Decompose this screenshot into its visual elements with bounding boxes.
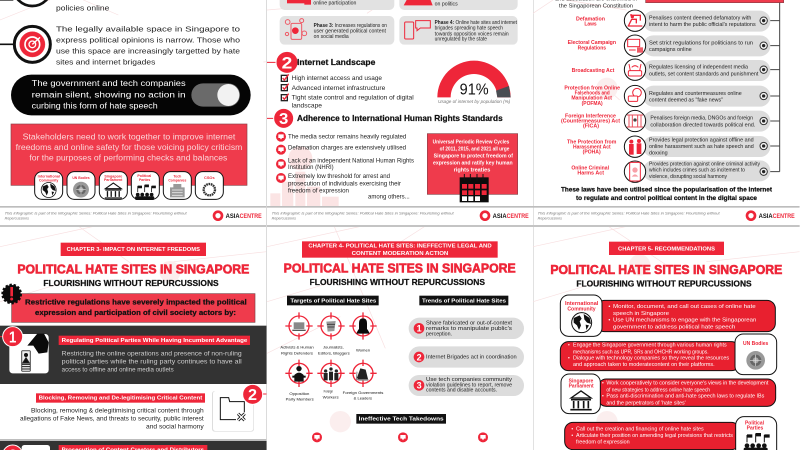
block: Political Parties: Call out the creation and financing of online hate sites bbox=[576, 426, 704, 432]
card: Political Parties: Political bbox=[137, 174, 151, 178]
row: Online Criminal Harms Act: Online Criminal bbox=[571, 166, 610, 172]
chapter label: CHAPTER 5- RECOMMENDATIONS bbox=[618, 246, 715, 252]
row: Defamation Laws: Defamation bbox=[576, 17, 605, 23]
target: Opposition: Party Members bbox=[286, 396, 314, 401]
bullet list: human rights: Defamation charges are extensively utilised bbox=[288, 145, 406, 152]
card: phase 2 bbox=[399, 0, 518, 10]
card: Political Parties: Parties bbox=[139, 178, 150, 182]
block: Singapore Parliament: and the perpetrators of 'hate sites' bbox=[606, 400, 686, 406]
row: Broadcasting Act: Broadcasting Act bbox=[572, 68, 615, 74]
row: POFMA: (POFMA) bbox=[582, 101, 603, 107]
target: Opposition: Opposition bbox=[289, 391, 309, 396]
callout: stakeholders box: for the purposes of performing checks and balances bbox=[29, 153, 227, 162]
block: UN Bodies: • bbox=[568, 355, 570, 361]
row: POFMA: Protection from Online bbox=[564, 85, 620, 91]
label: targets bbox=[287, 296, 379, 305]
block: Singapore Parliament: Pass anti-discrimination and anti-hate speech laws to regulate IBs bbox=[606, 394, 765, 400]
trend 3: violation guidelines to report, remove bbox=[426, 382, 512, 388]
row: Online Criminal Harms Act bbox=[571, 160, 770, 182]
bullet list: human rights: among others... bbox=[368, 194, 410, 201]
block: Singapore Parliament: • bbox=[602, 394, 604, 400]
row: POFMA: content deemed as "fake news" bbox=[649, 97, 723, 103]
target: Foreign Workers: Foreign bbox=[324, 388, 333, 393]
trend 2: 2 bbox=[417, 352, 422, 362]
trend 1 bbox=[409, 318, 524, 339]
card: Singapore Parliament bbox=[99, 172, 127, 199]
target: Opposition bbox=[285, 360, 314, 401]
trend 3: 3 bbox=[417, 381, 422, 391]
panel: chapter 1 history and landscape bbox=[267, 0, 534, 225]
label: ineffective takedowns: Ineffective Tech Takedowns bbox=[359, 417, 444, 423]
target: Foreign Governments: Foreign Governments bbox=[343, 390, 383, 395]
callout: restrictive regulations: Restrictive regulations have severely impacted the political bbox=[25, 298, 247, 307]
card: Tech Companies bbox=[163, 172, 191, 199]
block: International Community: International bbox=[565, 301, 599, 307]
block: International Community: • bbox=[608, 304, 610, 310]
footer bbox=[0, 206, 267, 221]
block: International Community: government to address political hate speech bbox=[613, 325, 735, 331]
section 3: prosecution bbox=[0, 441, 267, 450]
row: POHA: Provides legal protection against offline and bbox=[649, 137, 754, 143]
row: Defamation Laws: intent to harm the public official's reputations bbox=[649, 22, 756, 28]
callout: UPR cycles bbox=[427, 134, 518, 202]
callout: UPR cycles: expression and ratify key human bbox=[433, 161, 513, 167]
trend 3: Use tech companies community bbox=[426, 377, 512, 383]
row: Electoral Campaign Regulations: Electoral Campaign bbox=[568, 40, 616, 46]
gauge chart: 91% internet usage: Usage of internet by population (%) bbox=[438, 99, 511, 104]
callout: UPR cycles: Universal Periodic Review Cycles bbox=[433, 139, 510, 145]
callout: government silent toggle: remain silent, showing no action in bbox=[32, 90, 186, 99]
row: POHA: online harassment such as hate speech and bbox=[649, 144, 754, 150]
row: Defamation Laws: Laws bbox=[584, 22, 597, 28]
text: laws conclusion: to regulate and control political content in the digital space bbox=[576, 195, 757, 202]
chapter label bbox=[61, 243, 206, 256]
icon: cropped top circle bbox=[0, 0, 52, 6]
section 1: regulating political parties: access to offline and online media outlets bbox=[62, 366, 174, 373]
callout: stakeholders box: Stakeholders need to work together to improve internet bbox=[23, 133, 236, 142]
title bbox=[17, 263, 249, 288]
section 1: regulating political parties: 1 bbox=[9, 329, 17, 346]
section 2: blocking: Blocking, Removing and De-legitimising Critical Content bbox=[39, 396, 202, 402]
label: trends bbox=[419, 296, 508, 305]
text: legally available space: use this space are increasingly targetted by hate bbox=[56, 46, 240, 55]
block: International Community: Community bbox=[567, 306, 596, 312]
red box bottom edge bbox=[646, 0, 784, 3]
heading: 2 Internet Landscape: Internet Landscape bbox=[297, 57, 376, 67]
gauge chart: 91% internet usage bbox=[437, 61, 511, 104]
callout: UPR cycles: of 2011, 2015, and 2021 all urge bbox=[440, 147, 510, 153]
text: top paragraph end: policies online bbox=[56, 3, 109, 12]
text: constitution intro bbox=[555, 0, 637, 9]
card: phase 3: on social media bbox=[314, 34, 349, 40]
card: phase 4: unregulated by the state bbox=[435, 37, 487, 43]
block: UN Bodies: Engage the Singapore government through various human rights bbox=[573, 343, 727, 349]
block: UN Bodies: • bbox=[568, 343, 570, 349]
target: Journalists: Editors, Bloggers bbox=[318, 350, 350, 355]
card: phase 1 bbox=[280, 0, 394, 10]
block: International Community: Use UN mechanisms to engage with the Singaporean bbox=[613, 318, 756, 324]
section 1: regulating political parties: Restricting the online operations and presence of non-ruling bbox=[62, 351, 242, 358]
trend 2 bbox=[409, 346, 524, 368]
chapter label: CONTENT MODERATION ACTION bbox=[352, 251, 449, 257]
card: UN Bodies bbox=[67, 172, 95, 199]
callout: stakeholders box: freedoms and online safety for those voicing policy criticism bbox=[16, 143, 243, 152]
card: International Community: International bbox=[38, 174, 60, 178]
row: POHA bbox=[567, 136, 770, 157]
trend 3: contents and disable accounts. bbox=[426, 388, 497, 394]
text: laws conclusion: These laws have been utilised since the popularisation of the internet bbox=[561, 186, 773, 193]
row: POHA: doxxing bbox=[649, 150, 668, 156]
block: International Community: Monitor, document, and call out cases of online hate bbox=[613, 304, 756, 310]
icon: calendar bbox=[460, 174, 489, 202]
title bbox=[550, 263, 782, 288]
trend 1: remarks to manipulate public's bbox=[426, 326, 512, 332]
icon: alert badge bbox=[3, 285, 21, 303]
callout: UPR cycles: rights treaties bbox=[454, 167, 491, 173]
checklist: internet landscape: High internet access and usage bbox=[292, 75, 382, 82]
row: Online Criminal Harms Act: which includes crimes such as incitement to bbox=[649, 168, 745, 174]
trend 2: Internet Brigades act in coordination bbox=[426, 354, 517, 360]
section 2: blocking: allegations of Fake News, and threats to security, public interest bbox=[20, 416, 204, 423]
section 1: regulating political parties bbox=[0, 326, 267, 384]
row: POHA: Harassment Act bbox=[573, 144, 611, 150]
chapter label: CHAPTER 3- IMPACT ON INTERNET FREEDOMS bbox=[67, 247, 200, 253]
row: POFMA: Regulates and countermeasures online bbox=[649, 91, 742, 97]
connector tree bbox=[768, 3, 780, 172]
row: Online Criminal Harms Act: Harms Act bbox=[577, 171, 604, 177]
callout: restrictive regulations: expression and participation of civil society actors by: bbox=[35, 308, 236, 317]
row: Defamation Laws bbox=[576, 10, 770, 32]
row: POHA: The Protection from bbox=[567, 139, 617, 145]
block: Political Parties: Parties bbox=[747, 426, 764, 432]
stakeholder icons row bbox=[35, 172, 223, 200]
block: Singapore Parliament bbox=[561, 374, 776, 414]
row: Broadcasting Act bbox=[572, 59, 770, 81]
card: Singapore Parliament: Singapore bbox=[104, 174, 122, 178]
block: Singapore Parliament: Singapore bbox=[569, 378, 594, 384]
card: Singapore Parliament: Parliament bbox=[104, 178, 123, 182]
row: Electoral Campaign Regulations: Set strict regulations for politicians to run bbox=[649, 40, 753, 46]
target: Activists: Rights Defenders bbox=[281, 350, 313, 355]
footer bbox=[533, 206, 800, 221]
block: Political Parties bbox=[565, 417, 777, 450]
bullet list: human rights: Lack of an independent National Human Rights bbox=[288, 157, 414, 164]
card: phase 3: Phase 3: Increases regulations on bbox=[314, 23, 387, 29]
heading: 3 Adherence bbox=[267, 108, 503, 128]
icons: takedown bullets bbox=[312, 432, 488, 442]
card: UN Bodies: UN Bodies bbox=[72, 176, 90, 180]
block: UN Bodies: UN Bodies bbox=[743, 341, 769, 347]
text: laws conclusion bbox=[561, 186, 773, 202]
target: Activists: Activists & Human bbox=[280, 345, 314, 350]
block: Singapore Parliament: • bbox=[602, 381, 604, 387]
block: Political Parties: freedom of expression bbox=[576, 440, 630, 446]
row: POHA: (POHA) bbox=[583, 149, 601, 155]
block: UN Bodies bbox=[560, 334, 777, 375]
heading: 2 Internet Landscape bbox=[267, 51, 376, 73]
block: UN Bodies: and approach taken to moderatecontent on their platforms. bbox=[573, 362, 715, 368]
row: FICA: (FICA) bbox=[583, 124, 599, 130]
footer bbox=[267, 206, 534, 221]
target: Foreign Governments bbox=[343, 360, 383, 400]
row: Broadcasting Act: outlets, set content standards and punishment bbox=[649, 71, 759, 77]
bullet list: human rights: Extremely low threshold for arrest and bbox=[288, 173, 390, 180]
chapter label bbox=[609, 242, 724, 255]
chapter label bbox=[302, 241, 498, 258]
block: Political Parties: • bbox=[571, 433, 573, 439]
row: FICA: collaboration directed towards political end. bbox=[650, 122, 755, 128]
section 2: blocking: 2 bbox=[248, 387, 257, 404]
card: phase 4: brigades spreading hate speech bbox=[435, 26, 503, 32]
trend 1: Share fabricated or out-of-context bbox=[426, 320, 513, 326]
section 1: regulating political parties: political parties while the ruling party continues to have all bbox=[62, 359, 242, 366]
card: phase 4: towards opposition voices remain bbox=[435, 31, 509, 37]
row: FICA: Foreign Interference bbox=[565, 113, 616, 119]
row: Online Criminal Harms Act: violence, disrupting social harmony bbox=[649, 174, 727, 180]
panel: chapter 3 impact on internet freedoms bbox=[0, 225, 267, 450]
target: Foreign Workers: Workers bbox=[323, 394, 339, 399]
callout: stakeholders box bbox=[11, 124, 247, 185]
target: Activists bbox=[280, 312, 314, 355]
row: Broadcasting Act: Regulates licensing of independent media bbox=[649, 65, 748, 71]
skyline decoration bbox=[270, 146, 339, 206]
text: legally available space: The legally available space in Singapore to bbox=[56, 25, 240, 34]
card: International Community bbox=[35, 172, 63, 199]
target: Foreign Workers bbox=[317, 360, 345, 399]
block: Political Parties: Political bbox=[745, 420, 765, 426]
bullet list: human rights: freedom of expression bbox=[288, 188, 349, 195]
row: FICA: Penalises foreign media, DNGOs and foreign bbox=[650, 116, 753, 122]
gauge chart: 91% internet usage: 91% bbox=[460, 82, 489, 99]
heading: 2 Internet Landscape: 2 bbox=[282, 53, 292, 72]
row: POFMA: Falsehoods and bbox=[575, 91, 610, 97]
card: CSOs bbox=[195, 172, 223, 199]
icon: target bbox=[0, 26, 50, 62]
block: UN Bodies: mechanisms such as UPR, SRs and OHCHR working groups. bbox=[573, 349, 709, 355]
target: Journalists: Journalists, bbox=[323, 345, 344, 350]
row: Electoral Campaign Regulations: Regulations bbox=[578, 45, 606, 51]
callout: government silent toggle: curbing this form of hate speech bbox=[32, 102, 158, 111]
checklist: internet landscape bbox=[281, 74, 414, 109]
checklist: internet landscape: Advanced internet infrastructure bbox=[292, 85, 386, 92]
target: Journalists bbox=[317, 312, 350, 355]
card: phase 3: user generated political content bbox=[314, 28, 387, 34]
panel: chapter 4 political hate sites bbox=[267, 225, 534, 450]
heading: 3 Adherence: Adherence to International Human Rights Standards bbox=[297, 113, 503, 123]
card: CSOs: CSOs bbox=[204, 176, 215, 180]
row: POFMA: Manipulation Act bbox=[571, 96, 612, 102]
heading: 3 Adherence: 3 bbox=[279, 111, 288, 128]
row: POFMA bbox=[564, 85, 770, 107]
row: FICA: (Countermeasures) Act bbox=[561, 118, 620, 124]
section 2: blocking: Blocking, removing & delegitimising critical content through bbox=[31, 408, 204, 415]
block: International Community bbox=[560, 295, 775, 336]
text: constitution intro: the Singaporean Constitution bbox=[559, 3, 633, 9]
card: phase 2: on politics bbox=[435, 2, 458, 8]
label: ineffective takedowns bbox=[356, 414, 446, 424]
title bbox=[284, 262, 516, 287]
card: International Community: Community bbox=[39, 179, 58, 183]
block: Singapore Parliament: Parliament bbox=[569, 383, 594, 389]
callout: UPR cycles: Singapore to protect freedom of bbox=[434, 154, 513, 160]
panel: conclusion bbox=[0, 0, 267, 225]
card: phase 4 bbox=[399, 16, 518, 45]
panel: chapter 5 recommendations bbox=[533, 225, 800, 450]
target: Women bbox=[349, 312, 377, 353]
callout: restrictive regulations bbox=[3, 285, 255, 322]
card: Tech Companies: Tech bbox=[173, 174, 181, 178]
bullet list: human rights: The media sector remains heavily regulated bbox=[288, 133, 407, 140]
target: Foreign Governments: & Leaders bbox=[354, 395, 372, 400]
text: legally available space: express political opinions is narrow. Those who bbox=[56, 35, 240, 44]
block: Singapore Parliament: Work cooperatively to consider everyone's views in the development bbox=[606, 381, 769, 387]
bullet list: human rights: prosecution of individuals exercising their bbox=[288, 180, 401, 187]
callout: government silent toggle: The government and tech companies bbox=[32, 79, 186, 88]
block: International Community: speech in Singapore bbox=[613, 311, 669, 317]
label: targets: Targets of Political Hate Sites bbox=[290, 298, 376, 304]
section 2: blocking: and social harmony bbox=[146, 424, 205, 431]
block: Singapore Parliament: of new strategies to address online hate speech bbox=[606, 387, 710, 393]
card: Political Parties bbox=[131, 172, 159, 200]
row: FICA bbox=[561, 110, 770, 132]
card: phase 4: Phase 4: Online hate sites and internet bbox=[435, 20, 518, 26]
text: legally available space: sites and internet brigades bbox=[56, 57, 156, 66]
panel: chapter 2 legal framework bbox=[533, 0, 800, 221]
row: Defamation Laws: Penalises content deemed defamatory with bbox=[649, 15, 751, 21]
checklist: internet landscape: landscape bbox=[292, 102, 322, 109]
label: trends: Trends of Political Hate Sites bbox=[422, 299, 506, 305]
section 1: regulating political parties: Regulating Political Parties While Having Incumbent Advantage bbox=[62, 338, 247, 344]
chapter label: CHAPTER 4- POLITICAL HATE SITES: INEFFECTIVE LEGAL AND bbox=[308, 244, 492, 250]
card: Tech Companies: Companies bbox=[168, 178, 186, 182]
block: UN Bodies: Dialogue with technology companies so they reveal the resources bbox=[573, 355, 730, 361]
bullet list: human rights bbox=[276, 132, 414, 201]
checklist: internet landscape: Tight state control and regulation of digital bbox=[292, 95, 414, 102]
block: International Community: • bbox=[608, 318, 610, 324]
block: Political Parties: • bbox=[571, 426, 573, 432]
callout: government silent toggle bbox=[11, 75, 251, 115]
card: phase 3 bbox=[280, 16, 394, 45]
card: phase 1: online participation bbox=[313, 1, 357, 7]
trend 1: 1 bbox=[417, 324, 422, 334]
trend 3 bbox=[409, 375, 524, 396]
trend 1: perception. bbox=[426, 331, 452, 337]
text: legally available space bbox=[56, 25, 240, 66]
block: Political Parties: Articulate their position on amending legal provisions that restricts bbox=[576, 433, 734, 439]
row: Electoral Campaign Regulations: campaigns online bbox=[649, 47, 692, 53]
row: Electoral Campaign Regulations bbox=[568, 35, 770, 56]
section 2: blocking bbox=[20, 384, 267, 432]
target: Women: Women bbox=[356, 348, 370, 353]
bullet list: human rights: Institution (NHRI) bbox=[288, 164, 334, 171]
row: Online Criminal Harms Act: Provides protection against online criminal activity bbox=[649, 162, 760, 168]
